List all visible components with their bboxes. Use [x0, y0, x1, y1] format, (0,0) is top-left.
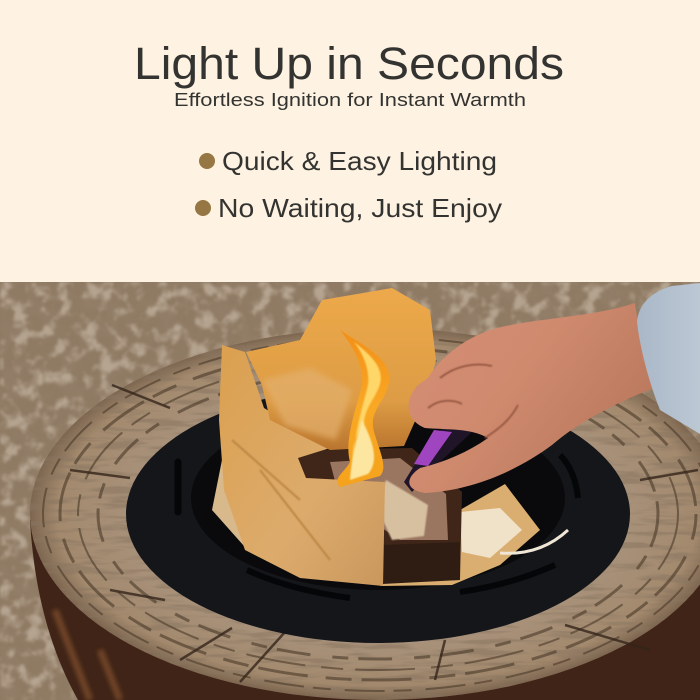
bullet: no waiting: No Waiting, Just Enjoy [218, 193, 502, 223]
bullet: quick lighting: Quick & Easy Lighting [222, 146, 497, 176]
background panel [0, 0, 700, 282]
inner pale paper [212, 450, 568, 586]
black metal ring [126, 385, 630, 643]
photo: fire pit being lit [0, 282, 700, 700]
subtitle: Effortless Ignition for Instant Warmth [174, 90, 526, 110]
sleeve [637, 283, 700, 434]
hand [409, 303, 654, 493]
pit opening [191, 406, 565, 590]
cardboard fire starter box [298, 448, 462, 584]
title: Light Up in Seconds [134, 38, 564, 89]
stump top with rings [30, 328, 700, 700]
lighter [404, 426, 474, 492]
stump side bark [30, 520, 700, 700]
gravel ground [0, 282, 700, 700]
flame [337, 330, 389, 487]
kraft paper bag [219, 288, 436, 586]
